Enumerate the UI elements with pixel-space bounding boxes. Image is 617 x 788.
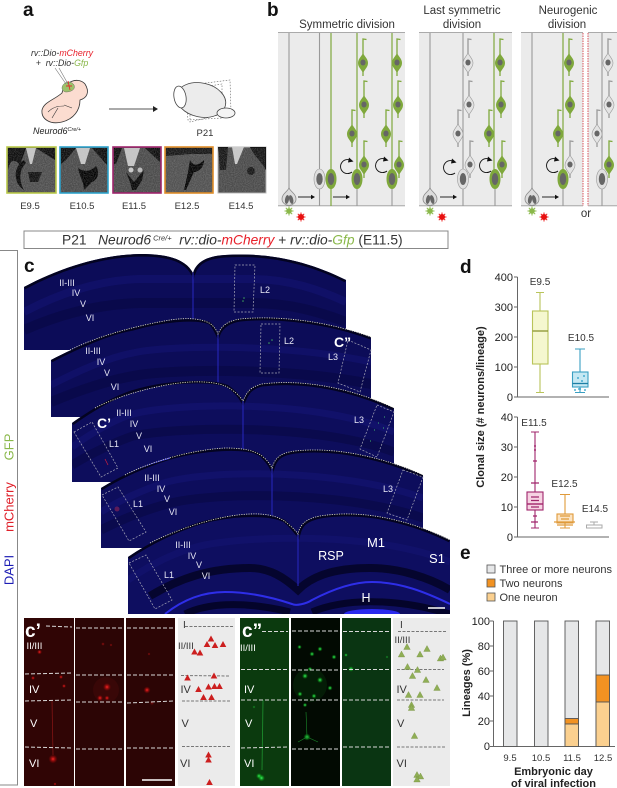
panel b: division schemes: [267, 0, 617, 222]
section 4: II-III: [144, 473, 160, 483]
x tick labels: [503, 753, 612, 764]
x tick labels: 12.5: [594, 753, 612, 764]
chart: E9.5 and E10.5: 400: [495, 272, 513, 284]
thumbnail captions: [20, 201, 253, 212]
mCherry image 2: [75, 618, 124, 786]
layer labels on image: II/III: [26, 641, 42, 652]
chart: E9.5 and E10.5: E10.5: [568, 333, 595, 344]
P21 label: P21: [197, 128, 213, 139]
section 4: L1: [133, 499, 143, 509]
section 5: IV: [188, 551, 196, 561]
thumbnail captions: E14.5: [229, 201, 253, 212]
section 1: V: [80, 299, 86, 309]
layer labels on image: V: [30, 718, 38, 730]
channel legend box: [0, 250, 18, 785]
title bar: Cre/+: [151, 234, 172, 242]
thumbnail captions: E12.5: [175, 201, 199, 212]
scheme: last symmetric division: Last symmetric: [423, 5, 501, 17]
axes: 60: [478, 666, 490, 678]
title bar: mCherry + rv::dio-Gfp (E11.5): [221, 232, 403, 248]
axes: [472, 616, 615, 753]
mCherry image 1: [24, 618, 74, 786]
section 4: [101, 445, 423, 548]
cortical layer dashed lines: [241, 631, 390, 749]
chart: E11.5, E12.5, E14.5: 20: [501, 472, 513, 484]
layer labels on image: VI: [244, 758, 254, 770]
layer labels on image: IV: [29, 684, 40, 696]
chart: E9.5 and E10.5: 200: [495, 332, 513, 344]
section 4: L3: [383, 484, 393, 494]
thumbnail E14.5: [218, 147, 266, 193]
channel legend box: DAPI: [2, 555, 16, 585]
x tick labels: 10.5: [532, 753, 550, 764]
section 2: C”: [334, 334, 351, 350]
layer labels on image: VI: [29, 758, 39, 770]
chart: E9.5 and E10.5: 300: [495, 302, 513, 314]
section 1: VI: [86, 313, 94, 323]
section 3: L3: [354, 415, 364, 425]
section 3: V: [136, 431, 142, 441]
section 2: V: [104, 368, 110, 378]
chart: E9.5 and E10.5: 100: [495, 362, 513, 374]
section 5: L1: [164, 570, 174, 580]
section 3: L1: [109, 439, 119, 449]
legend: One neuron: [500, 592, 558, 604]
scheme: last symmetric division: division: [443, 19, 481, 31]
section 4: V: [164, 494, 170, 504]
box plot E11.5: [527, 432, 543, 528]
layer labels on image: [25, 621, 42, 770]
axes: 100: [472, 616, 490, 628]
legend: Three or more neurons: [500, 564, 612, 576]
section 4: IV: [157, 484, 165, 494]
box plot E9.5: [532, 292, 548, 392]
channel legend box: GFP: [2, 434, 16, 460]
chart: E9.5 and E10.5: [495, 272, 609, 404]
scheme: last symmetric division: [419, 5, 512, 222]
GFP neuron position map: V: [397, 718, 405, 730]
layer labels on image: c”: [242, 621, 262, 642]
section 3: II-III: [116, 408, 132, 418]
section 1: L2: [260, 285, 270, 295]
scale bar: [142, 779, 172, 781]
box plot E10.5: [572, 349, 588, 392]
box plot E14.5: [586, 522, 602, 528]
embryo genotype label: Cre/+: [68, 127, 82, 133]
chart: E9.5 and E10.5: 0: [507, 392, 513, 404]
layer labels on image: IV: [244, 684, 255, 696]
section 3: C’: [97, 415, 111, 431]
panel c prime: mCherry images: [24, 618, 235, 786]
section 2: L2: [284, 336, 294, 346]
axes: 20: [478, 716, 490, 728]
chart: E11.5, E12.5, E14.5: E11.5: [521, 418, 547, 429]
section 2: [51, 315, 371, 417]
chart: E11.5, E12.5, E14.5: 30: [501, 442, 513, 454]
section 3: IV: [130, 419, 138, 429]
mCherry neuron position map: V: [182, 718, 190, 730]
y axis title: Lineages (%): [461, 649, 473, 717]
mCherry image 3: [126, 618, 175, 786]
thumbnail captions: E9.5: [20, 201, 40, 212]
construct labels: rv::Dio-mCherry: [31, 48, 94, 58]
panel c: brain sections: [24, 250, 450, 619]
x axis title: Embryonic day: [514, 766, 594, 778]
icon: embryo: [42, 68, 87, 123]
panel letter c: c: [24, 256, 35, 277]
section 5: H: [361, 591, 371, 605]
section 4: VI: [169, 507, 177, 517]
embryo genotype label: Neurod6: [33, 126, 68, 136]
construct labels second line: + rv::Dio-Gfp: [36, 58, 88, 68]
section 3: [72, 378, 394, 482]
chart: E11.5, E12.5, E14.5: 40: [501, 412, 513, 424]
GFP image 3: [342, 618, 391, 786]
layer labels on image: V: [245, 718, 253, 730]
arrow: [109, 106, 158, 112]
panel c double prime: GFP images: [240, 618, 450, 786]
stacked bars: [504, 621, 610, 746]
layer labels on image: II/III: [240, 643, 256, 654]
y axis title: Clonal size (# neurons/lineage): [475, 326, 487, 488]
section 5: S1: [429, 551, 445, 566]
title bar: [24, 231, 448, 248]
section 2: VI: [111, 382, 119, 392]
mCherry neuron position map: II/III: [178, 641, 194, 652]
channel legend box: mCherry: [2, 482, 16, 532]
axes: 0: [484, 741, 490, 753]
chart: E11.5, E12.5, E14.5: [501, 412, 609, 544]
GFP neuron position map: I: [400, 620, 403, 631]
thumbnail captions: E10.5: [70, 201, 94, 212]
x tick labels: 9.5: [503, 753, 517, 764]
mCherry neuron position map: VI: [180, 758, 190, 770]
panel e: lineage composition bars: [460, 543, 615, 788]
section 5: RSP: [318, 549, 344, 563]
GFP neuron position map: [393, 618, 450, 786]
section 1: [24, 250, 346, 350]
section 2: L3: [328, 352, 338, 362]
cortical layer dashed lines: [25, 626, 174, 749]
title bar: rv::dio-: [172, 232, 222, 248]
thumbnail captions: E11.5: [122, 201, 146, 212]
x axis title: [511, 766, 596, 788]
layer labels on image: c’: [25, 621, 41, 642]
chart: E9.5 and E10.5: E9.5: [530, 277, 551, 288]
panel letter b: b: [267, 0, 279, 21]
scheme: neurogenic division: or: [581, 208, 591, 220]
section 1: II-III: [59, 278, 75, 288]
thumbnails row: [7, 147, 266, 193]
scheme: symmetric division: [278, 19, 405, 222]
axes: 80: [478, 641, 490, 653]
legend: Two neurons: [500, 578, 563, 590]
layer labels on image: [240, 621, 262, 770]
section 1: IV: [72, 288, 80, 298]
panel d: clonal size box plots: [460, 257, 609, 544]
legend: [487, 564, 612, 604]
GFP neuron position map: IV: [396, 684, 408, 696]
section 2: II-III: [85, 346, 101, 356]
chart: E11.5, E12.5, E14.5: 10: [501, 502, 513, 514]
scheme: neurogenic division: Neurogenic: [539, 5, 598, 17]
panel letter e: e: [460, 543, 471, 564]
scheme: neurogenic division: [521, 5, 617, 222]
thumbnail E10.5: [60, 147, 108, 193]
chart: E11.5, E12.5, E14.5: 0: [507, 532, 513, 544]
box plot E12.5: [554, 494, 575, 528]
axes: 40: [478, 691, 490, 703]
GFP neuron position map: II/III: [394, 635, 410, 646]
chart: E11.5, E12.5, E14.5: E14.5: [582, 504, 609, 515]
panel letter a: a: [23, 0, 34, 21]
thumbnail E9.5: [7, 147, 56, 193]
section 5: M1: [367, 535, 385, 550]
section 5: V: [196, 560, 202, 570]
section 5: VI: [202, 571, 210, 581]
mCherry neuron position map: [178, 618, 235, 786]
scheme: neurogenic division: division: [548, 19, 586, 31]
section 2: IV: [97, 357, 105, 367]
section 3: VI: [144, 444, 152, 454]
chart: E11.5, E12.5, E14.5: E12.5: [551, 479, 578, 490]
mCherry neuron position map: I: [183, 620, 186, 631]
section 5: [128, 510, 450, 619]
thumbnail E12.5: [165, 147, 213, 193]
thumbnail E11.5: [113, 147, 161, 193]
mCherry neuron position map: IV: [180, 684, 192, 696]
section 5: II-III: [175, 540, 191, 550]
GFP image 2: [291, 618, 340, 786]
GFP neuron position map: VI: [396, 758, 407, 770]
panel letter d: d: [460, 257, 472, 278]
icon: mouse brain with slice planes: [172, 78, 235, 122]
panel a: injection scheme: [7, 0, 266, 212]
title bar: P21 Neurod6: [62, 232, 151, 248]
x tick labels: 11.5: [563, 753, 581, 764]
GFP image 1: [240, 618, 289, 786]
scheme: symmetric division: Symmetric division: [299, 19, 395, 31]
